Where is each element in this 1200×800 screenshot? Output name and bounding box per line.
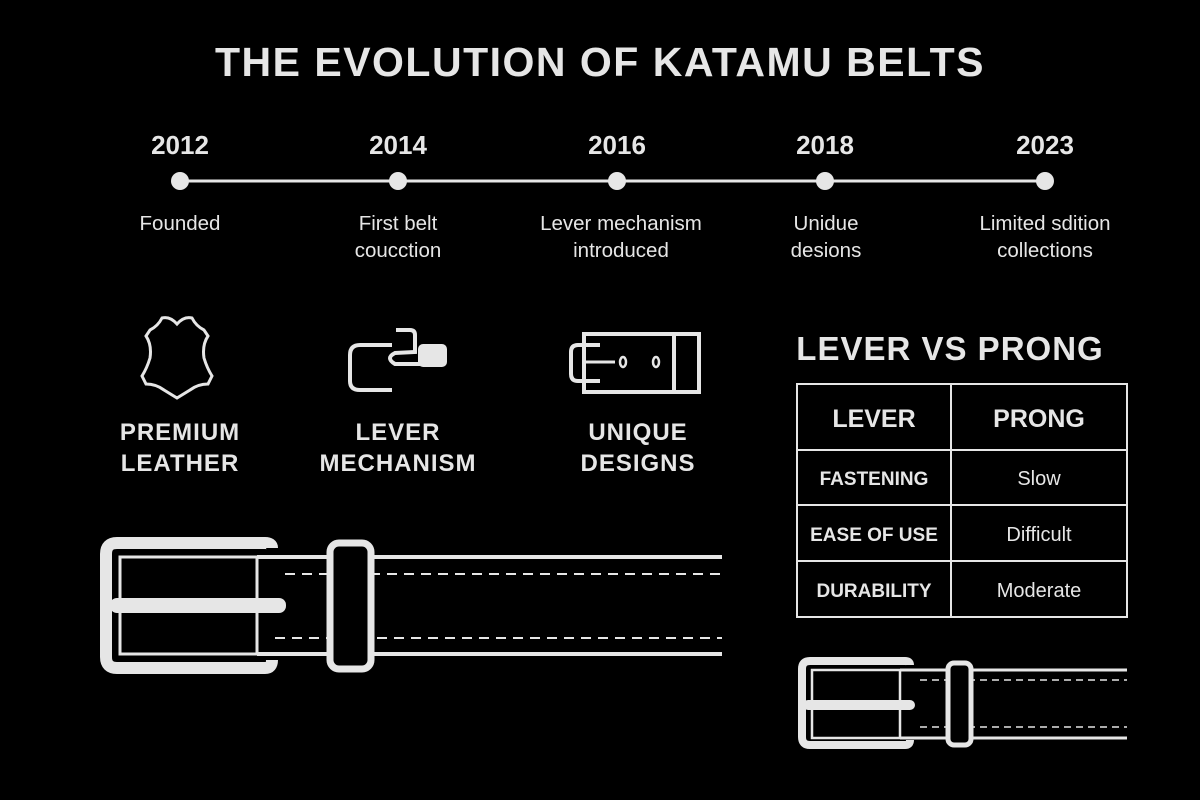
timeline: coucction [355, 239, 441, 262]
feature labels: MECHANISM [320, 450, 476, 477]
timeline: desions [791, 239, 861, 262]
timeline: Limited sdition [979, 212, 1111, 235]
timeline: Founded [140, 212, 220, 235]
timeline: introduced [573, 239, 669, 262]
comparison table: DURABILITY [816, 581, 932, 602]
feature labels: UNIQUE [588, 419, 688, 446]
comparison table [797, 384, 1127, 617]
comparison table: FASTENING [820, 469, 928, 490]
comparison table: Moderate [997, 580, 1081, 602]
comparison table: LEVER [832, 405, 916, 433]
feature labels: LEVER [355, 419, 441, 446]
timeline: Unidue [794, 212, 858, 235]
title: THE EVOLUTION OF KATAMU BELTS [215, 39, 985, 85]
timeline: 2016 [588, 130, 646, 160]
timeline: First belt [359, 212, 438, 235]
feature labels [120, 419, 696, 477]
timeline: 2023 [1016, 130, 1074, 160]
comparison table: PRONG [993, 405, 1085, 433]
feature labels: PREMIUM [120, 419, 240, 446]
small belt [802, 661, 1127, 745]
icon: leather [142, 318, 212, 398]
timeline: 2018 [796, 130, 854, 160]
comparison table: Slow [1017, 468, 1061, 490]
comparison table: EASE OF USE [810, 525, 938, 546]
timeline: collections [997, 239, 1093, 262]
icon: lever [350, 330, 445, 390]
timeline: 2014 [369, 130, 427, 160]
timeline [140, 130, 1111, 262]
heading: lever vs prong: LEVER VS PRONG [796, 330, 1104, 367]
large belt [106, 543, 722, 669]
icon: designs [571, 334, 699, 392]
timeline: 2012 [151, 130, 209, 160]
feature labels: LEATHER [121, 450, 239, 477]
feature labels: DESIGNS [580, 450, 696, 477]
comparison table: Difficult [1006, 524, 1072, 546]
timeline: Lever mechanism [540, 212, 702, 235]
